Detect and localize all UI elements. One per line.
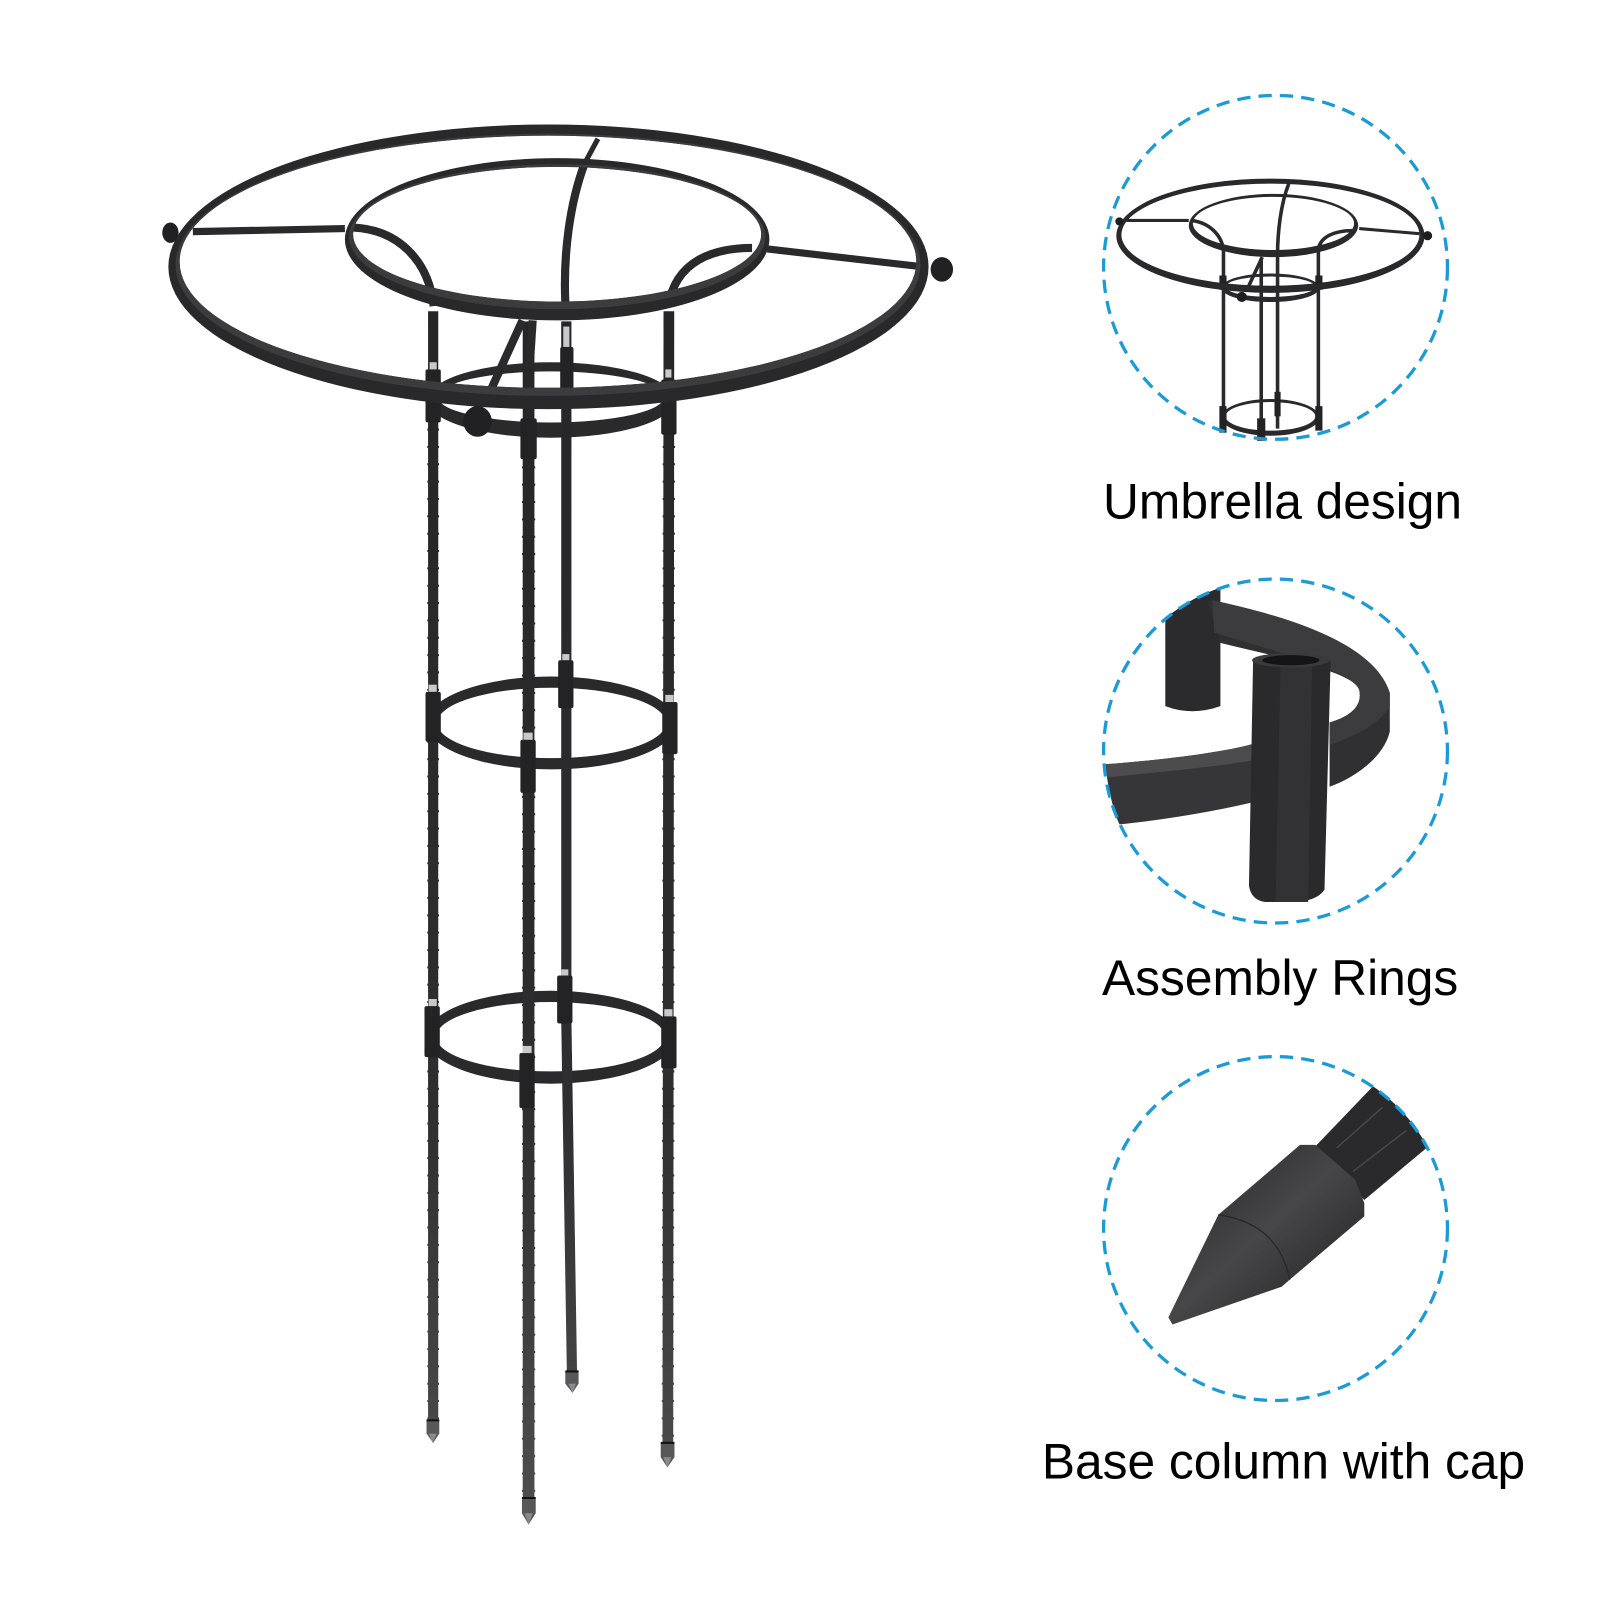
dashed circle	[1104, 1057, 1447, 1401]
spokes and arches	[193, 139, 918, 388]
silver pins	[429, 327, 673, 1053]
dashed circle	[1104, 95, 1447, 439]
connector sleeves	[424, 347, 678, 1108]
infographic canvas	[162, 94, 1524, 1524]
three ball ends	[162, 222, 953, 437]
outer ring of canopy	[168, 124, 929, 409]
post end caps	[427, 1370, 674, 1524]
panel: umbrella design	[1103, 95, 1462, 529]
main product: umbrella trellis	[162, 124, 953, 1524]
ring three	[426, 991, 676, 1084]
panel: base column with cap	[1042, 1057, 1525, 1490]
ring two	[427, 677, 677, 769]
label: Base column with cap: Base column with cap	[1042, 1434, 1525, 1490]
close-up of pointed cap	[1168, 1084, 1433, 1324]
inner ring of canopy	[345, 158, 769, 320]
label: Assembly Rings: Assembly Rings	[1102, 950, 1458, 1006]
dashed circle	[1104, 579, 1447, 923]
close-up of ring and socket	[1105, 582, 1390, 902]
mini umbrella trellis	[1115, 179, 1432, 441]
panel: assembly rings	[1102, 579, 1458, 1006]
four support posts	[433, 311, 669, 1498]
top small ring, behind posts	[428, 362, 674, 438]
label: Umbrella design: Umbrella design	[1103, 473, 1462, 529]
